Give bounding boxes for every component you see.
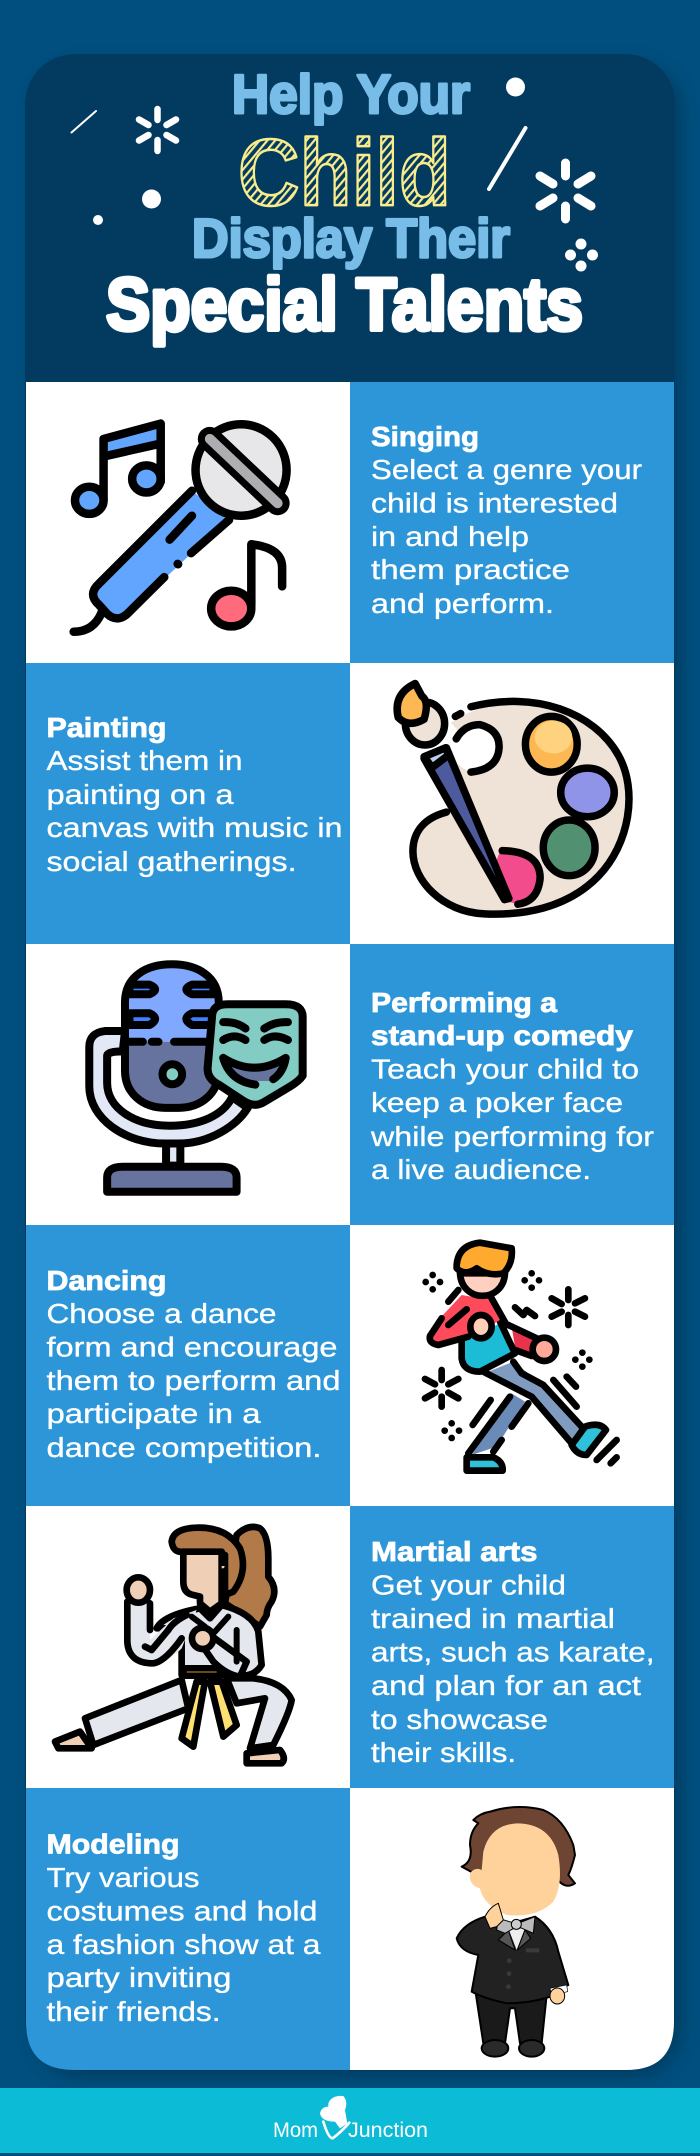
text: stand-up comedy: keep a poker face xyxy=(371,1087,623,1118)
text: painting: Assist them in xyxy=(46,745,242,776)
panel: stand-up comedy xyxy=(26,944,674,1226)
text: singing: Select a genre your xyxy=(371,454,642,485)
text: martial arts: Get your child xyxy=(371,1570,566,1600)
text: modeling: a fashion show at a xyxy=(46,1929,321,1960)
text: painting: social gatherings. xyxy=(46,846,296,877)
text: singing: and perform. xyxy=(371,588,554,619)
text: painting: painting on a xyxy=(46,779,234,810)
text: modeling xyxy=(46,1828,321,2027)
text: stand-up comedy: Teach your child to xyxy=(371,1054,639,1084)
text: stand-up comedy xyxy=(370,987,654,1185)
text: dancing: form and encourage xyxy=(46,1332,338,1362)
text: stand-up comedy: a live audience. xyxy=(371,1154,591,1185)
title line: Display Their: Display Their xyxy=(192,207,510,269)
decorative sparkles xyxy=(72,78,598,272)
logo wordmark: Mom xyxy=(273,2119,318,2142)
talent grid xyxy=(26,382,674,2070)
logo icon: mother and child xyxy=(320,2096,349,2138)
text: singing xyxy=(371,421,642,619)
text: modeling: party inviting xyxy=(46,1962,232,1993)
logo: MomJunction xyxy=(273,2096,428,2142)
text: martial arts: trained in martial xyxy=(371,1603,615,1634)
text: dancing xyxy=(46,1265,340,1463)
text: martial arts: their skills. xyxy=(371,1737,516,1768)
title line: Child: Child xyxy=(238,120,451,226)
panel: martial arts xyxy=(26,1506,674,1788)
text: martial arts: Martial arts xyxy=(371,1536,538,1567)
text: martial arts: and plan for an act xyxy=(371,1670,641,1701)
text: martial arts: to showcase xyxy=(371,1704,548,1735)
panel: singing xyxy=(26,382,674,664)
text: stand-up comedy: Performing a xyxy=(371,987,557,1018)
text: modeling: their friends. xyxy=(46,1996,220,2027)
icon: microphone with comedy mask xyxy=(89,964,303,1192)
panel: modeling xyxy=(26,1788,674,2070)
text: singing: them practice xyxy=(371,554,570,585)
text: dancing: Dancing xyxy=(46,1265,166,1296)
icon: dancing boy xyxy=(425,1243,617,1471)
text: singing: child is interested xyxy=(371,488,618,518)
icon: microphone and music notes xyxy=(74,424,287,632)
text: singing: Singing xyxy=(371,421,479,452)
text: painting: Painting xyxy=(46,712,166,743)
text: modeling: Try various xyxy=(46,1862,200,1893)
title line: Special Talents: Special Talents xyxy=(106,263,583,346)
logo wordmark: Junction xyxy=(348,2119,428,2142)
footer band xyxy=(0,2088,700,2153)
text: dancing: Choose a dance xyxy=(46,1298,276,1329)
text: painting xyxy=(46,712,342,877)
text: martial arts xyxy=(371,1536,654,1768)
text: modeling: Modeling xyxy=(46,1828,180,1860)
title block xyxy=(106,63,583,346)
panel: painting xyxy=(26,663,674,944)
text: stand-up comedy: while performing for xyxy=(370,1121,654,1152)
icon: karate girl xyxy=(55,1527,292,1763)
title line: Help Your: Help Your xyxy=(232,63,470,125)
text: painting: canvas with music in xyxy=(46,812,342,843)
text: stand-up comedy: stand-up comedy xyxy=(371,1020,633,1051)
icon: boy in tuxedo xyxy=(457,1807,575,2057)
text: dancing: participate in a xyxy=(46,1398,261,1429)
icon: paint palette and brush xyxy=(397,684,629,914)
text: singing: in and help xyxy=(371,521,529,552)
text: dancing: dance competition. xyxy=(46,1432,322,1463)
text: martial arts: arts, such as karate, xyxy=(371,1636,654,1668)
panel: dancing xyxy=(26,1225,674,1506)
text: modeling: costumes and hold xyxy=(46,1896,318,1926)
text: dancing: them to perform and xyxy=(46,1365,340,1396)
